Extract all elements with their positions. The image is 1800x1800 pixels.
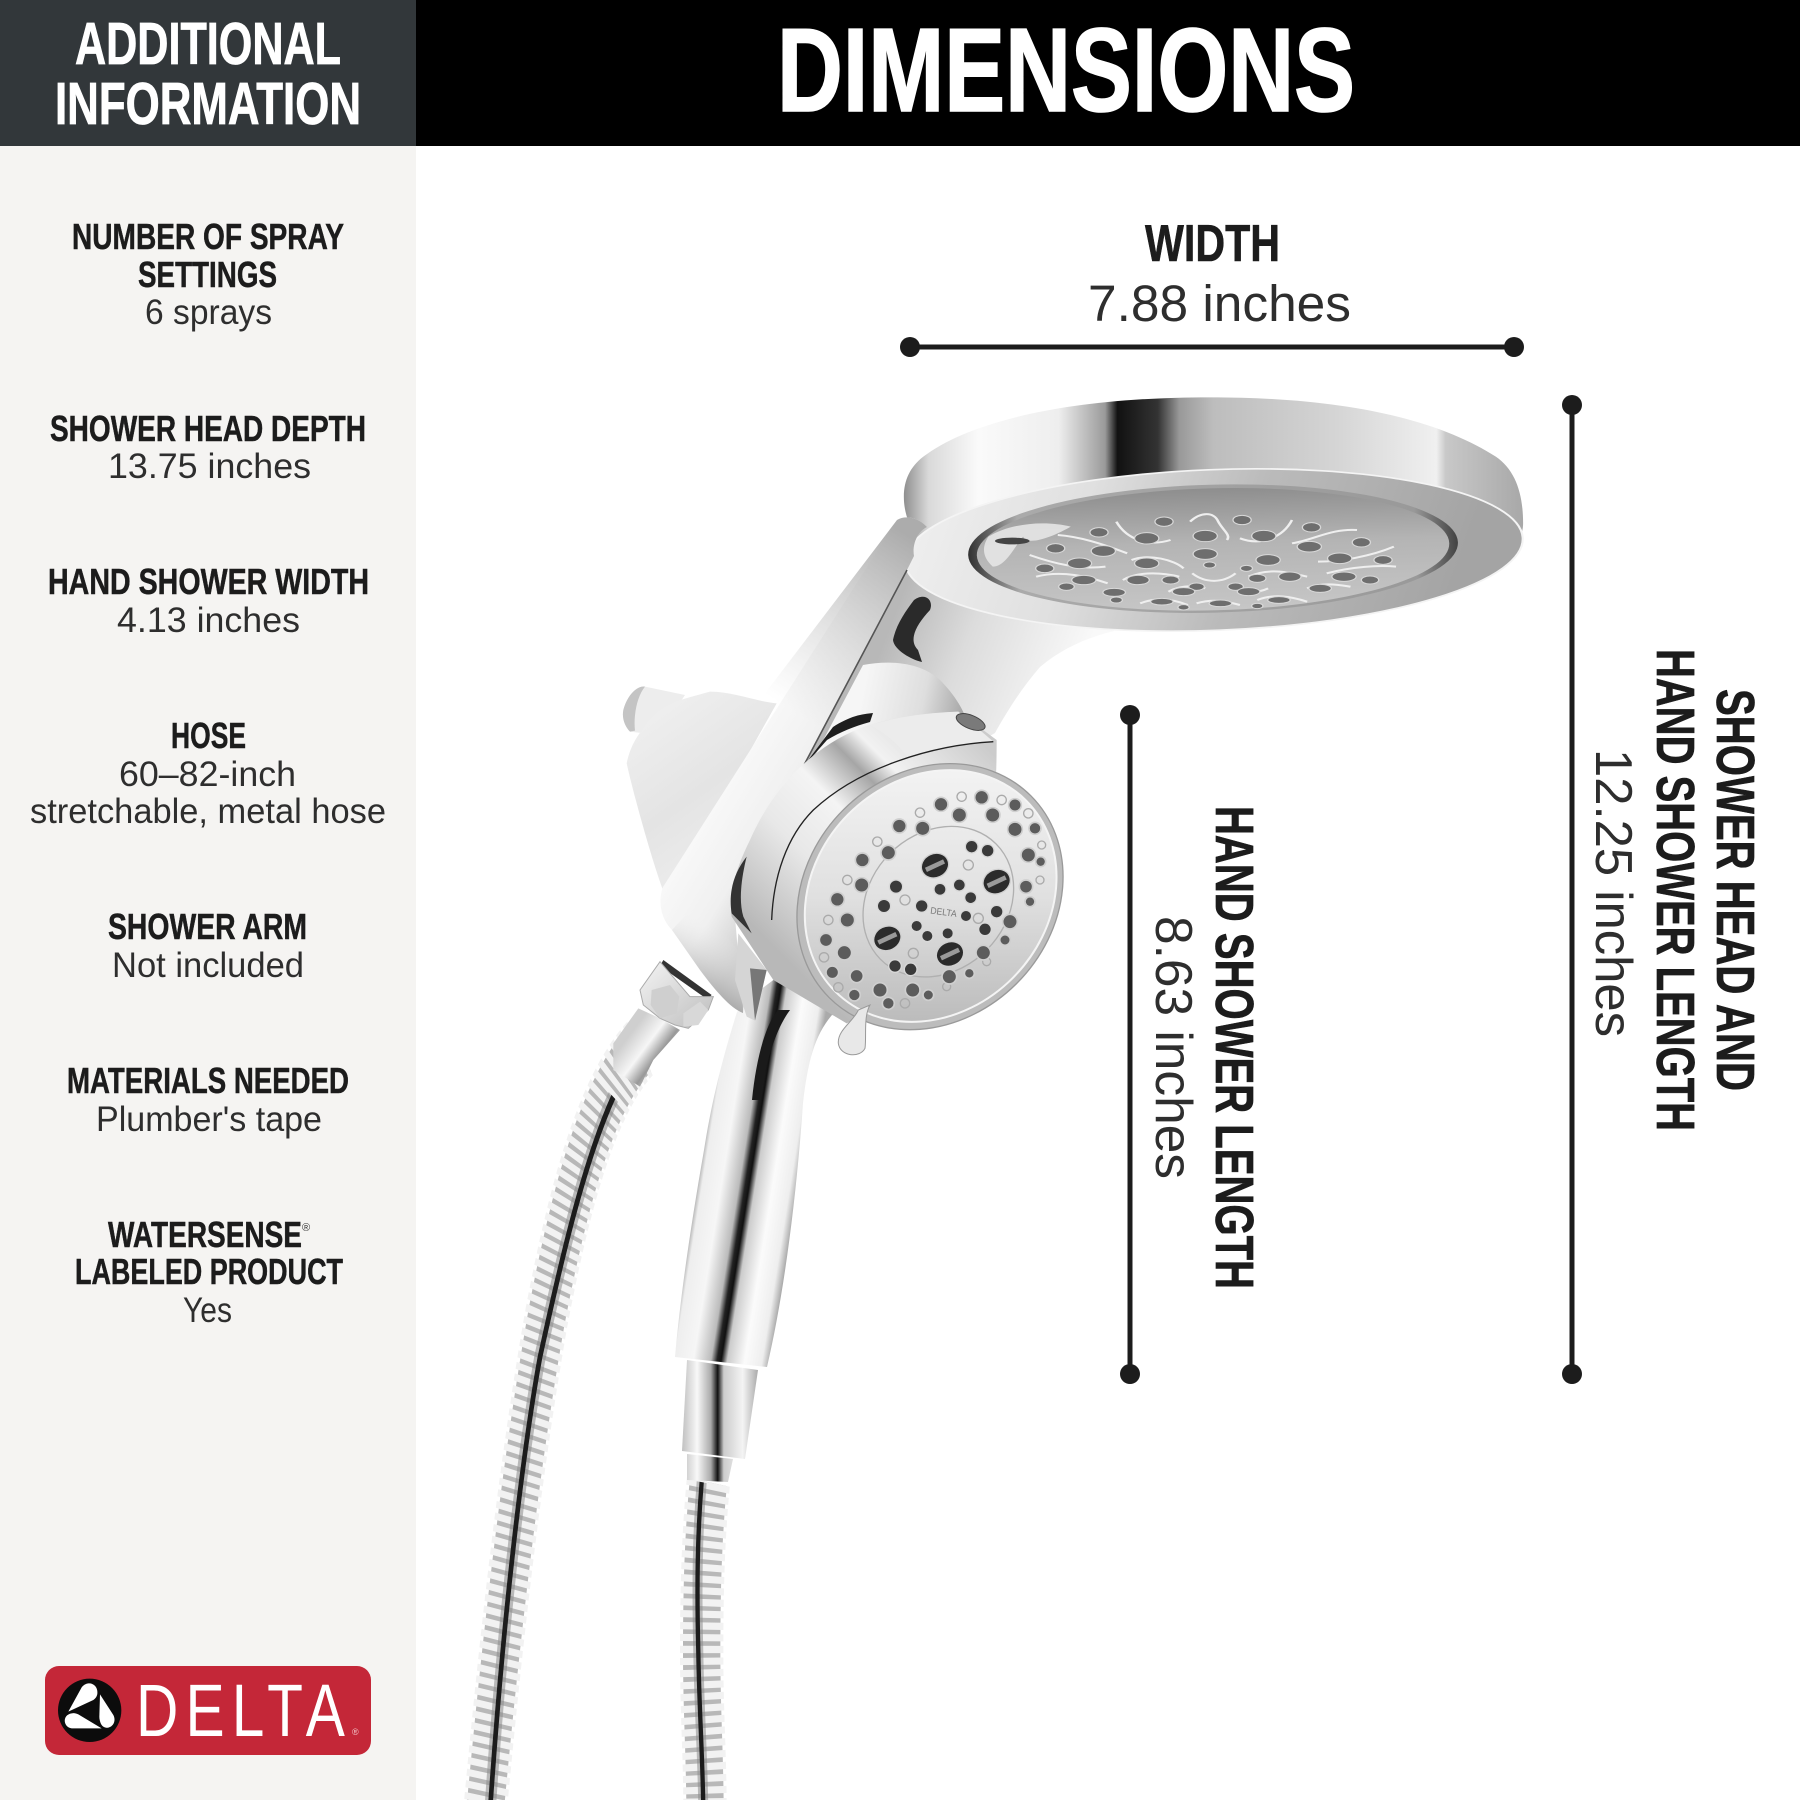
spec: shower arm: SHOWER ARM — [108, 906, 307, 947]
body top cap — [870, 712, 993, 758]
sidebar header bar — [0, 0, 416, 146]
spray face — [753, 719, 1108, 1073]
spec: watersense labeled product: Yes — [183, 1291, 232, 1330]
nut flat one — [651, 985, 679, 1018]
dark shadow wedge — [803, 713, 873, 767]
spec: materials needed: Plumber's tape — [96, 1100, 322, 1139]
outer nozzles — [819, 790, 1046, 1009]
logo wordmark: DELTA — [136, 1669, 352, 1752]
spec: watersense labeled product: WATERSENSE — [108, 1214, 302, 1255]
spec: watersense labeled product: LABELED PRODUCT — [75, 1251, 343, 1292]
hand shower length value: 8.63 inches — [1144, 916, 1202, 1179]
outer rim — [742, 709, 1118, 1084]
nozzle outline lobes — [819, 792, 1046, 1008]
spec: materials needed: MATERIALS NEEDED — [67, 1060, 349, 1101]
dimension: shower head and hand shower length — [1562, 395, 1765, 1384]
spec: hose — [30, 715, 386, 831]
rounded hump behind hand shower — [810, 663, 968, 765]
connector sleeve — [613, 1008, 680, 1087]
overall value: 12.25 inches — [1584, 749, 1642, 1037]
handle collar — [682, 1360, 758, 1459]
spec: hose: HOSE — [171, 715, 246, 756]
sidebar heading — [55, 11, 361, 137]
head flange — [900, 457, 1528, 643]
logo registered mark: ® — [352, 1727, 359, 1737]
spec: hose: stretchable, metal hose — [30, 792, 386, 831]
diagonal arm plate — [660, 517, 927, 1013]
dimension: hand shower length — [1120, 705, 1264, 1384]
dark clip gap — [731, 857, 752, 933]
neck of rain shower head — [800, 527, 1114, 800]
panel: dimensions header bar — [416, 0, 1800, 146]
hose connector and hex nuts — [613, 960, 713, 1087]
control button — [954, 710, 987, 734]
width label: WIDTH — [1145, 215, 1280, 273]
nut flat two — [683, 1002, 708, 1027]
overall label line one: SHOWER HEAD AND — [1705, 689, 1765, 1091]
panel: additional information sidebar — [0, 0, 416, 1800]
hand shower measure line — [1120, 705, 1140, 1384]
rain nozzles — [1036, 515, 1392, 610]
title: DIMENSIONS — [777, 4, 1355, 137]
spec: hand shower width: HAND SHOWER WIDTH — [48, 561, 369, 602]
product illustration: shower system — [485, 397, 1528, 1800]
spray plate — [974, 482, 1452, 617]
width value: 7.88 inches — [1088, 275, 1351, 332]
hose ferrule — [687, 1454, 733, 1482]
icon: Delta triangle mark — [58, 1679, 121, 1742]
hand shower body — [731, 712, 997, 1023]
right metal hose — [697, 1482, 708, 1800]
spec: shower head depth: SHOWER HEAD DEPTH — [50, 408, 366, 449]
spec: hand shower width — [48, 561, 369, 640]
neck reflection — [893, 597, 931, 662]
inner nozzles — [877, 840, 1003, 976]
spec: watersense labeled product — [75, 1214, 343, 1330]
spec: watersense labeled product: ® — [302, 1222, 310, 1234]
spec: shower head depth — [50, 408, 366, 486]
clip — [735, 933, 767, 1021]
spec: number of spray settings: 6 sprays — [145, 293, 272, 332]
head outer band — [904, 397, 1523, 631]
spec: materials needed — [67, 1060, 349, 1139]
Delta logo — [45, 1666, 371, 1755]
spec: number of spray settings: SETTINGS — [138, 254, 277, 295]
handle top highlight streak — [752, 1010, 790, 1100]
sidebar heading: ADDITIONAL — [75, 11, 341, 77]
spec: shower head depth: 13.75 inches — [108, 447, 311, 486]
spec: number of spray settings — [72, 216, 344, 332]
overall measure line — [1562, 395, 1582, 1384]
dimension: width — [900, 215, 1524, 357]
face brand text: DELTA — [930, 905, 958, 919]
plate reflection — [984, 523, 1071, 567]
overall label line two: HAND SHOWER LENGTH — [1645, 649, 1705, 1131]
rain shower head — [900, 397, 1528, 643]
sidebar heading: INFORMATION — [55, 71, 361, 137]
spec: hand shower width: 4.13 inches — [117, 601, 300, 640]
spec: shower arm — [108, 906, 307, 985]
left metal hose — [485, 1048, 640, 1800]
rear mount body — [623, 687, 777, 900]
hand shower length label: HAND SHOWER LENGTH — [1204, 806, 1264, 1289]
hand shower handle — [675, 960, 860, 1482]
width measure line — [900, 337, 1524, 357]
large center jets — [870, 849, 1014, 971]
plate rim — [965, 478, 1461, 619]
spec: number of spray settings: NUMBER OF SPRAY — [72, 216, 344, 257]
spec: shower arm: Not included — [112, 946, 304, 985]
spray selector tab — [838, 1005, 870, 1055]
spec: hose: 60–82-inch — [119, 755, 296, 794]
hex nut body — [640, 962, 713, 1028]
bright wavy channels — [1030, 514, 1396, 605]
hand shower head — [731, 709, 1118, 1084]
inner ring — [832, 796, 1044, 1008]
threaded ring — [660, 960, 712, 999]
